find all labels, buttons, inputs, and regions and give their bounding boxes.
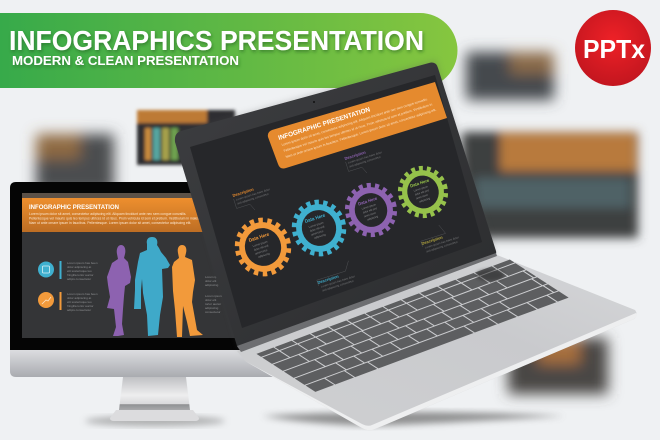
blurred thumbnail: right: [462, 132, 638, 238]
description: blue: [314, 260, 357, 293]
accent bar orange: [60, 292, 62, 310]
description: blue: sed adipiscing consectetur: [322, 279, 354, 292]
description: purple: [344, 145, 386, 178]
camera dot: [313, 101, 315, 103]
monitor right text: dolor elit: [205, 279, 217, 283]
icon: blue circle: [38, 262, 54, 278]
icon: orange circle: [38, 292, 54, 308]
badge: PPTx: PPTx: [583, 34, 646, 64]
gear: green: dolor elit sed: [414, 188, 430, 197]
text block orange: fringilla tortor auctor: [67, 304, 94, 308]
description: green: Lorem ipsum has been dolor: [424, 235, 459, 250]
gear: blue: Lorem ipsum: [308, 220, 325, 229]
monitor chin: [10, 350, 298, 377]
gear: green: Lorem ipsum: [413, 184, 429, 193]
monitor stand: [119, 377, 190, 410]
monitor header: INFOGRAPHIC PRESENTATION: [29, 204, 120, 211]
monitor header: Lorem ipsum dolor sit amet, consectetur adipiscing elit. Aliquam tincidunt ante nec sem congue convallis.: [29, 212, 186, 216]
monitor right text: tortor auctor: [205, 302, 221, 306]
gear: orange: dolor elit sed: [253, 243, 269, 252]
monitor right text: adipiscing: [205, 283, 219, 287]
laptop hinge: [237, 253, 497, 352]
monitor right text: adipiscing: [205, 306, 219, 310]
monitor header: [22, 198, 262, 232]
laptop lid: [175, 63, 496, 350]
text block orange: dolor adipiscing at: [67, 296, 91, 300]
laptop lid shadow: [178, 60, 496, 350]
monitor right text: dolor elit: [205, 298, 217, 302]
laptop header: [268, 82, 447, 168]
text block orange: Lorem ipsum has been: [67, 292, 98, 296]
gear: blue: adipiscing: [314, 232, 327, 240]
text block blue: fringilla tortor auctor: [67, 273, 94, 277]
banner: [0, 13, 458, 88]
monitor base: [110, 410, 199, 421]
laptop header: INFOGRAPHIC PRESENTATION: [277, 106, 371, 142]
blurred thumbnail: top right: [466, 52, 554, 100]
description: blue: Description: [317, 273, 340, 285]
monitor bezel: [10, 182, 298, 350]
gear: blue: amet tortor: [311, 229, 324, 237]
text block orange: adipis consectetur: [67, 308, 91, 312]
accent bar blue: [60, 261, 62, 279]
description: blue: Lorem ipsum has been dolor: [320, 274, 355, 289]
laptop header: Nam ut ante ornare ipsum in faucibus. Pellentesque. Lorem ipsum dolor sit amet, consectetur adipiscing elit.: [285, 108, 437, 159]
blurred thumbnail: upper left: [36, 134, 114, 194]
description: purple: Description: [344, 149, 367, 161]
silhouette: woman: [107, 245, 131, 336]
text block blue: Lorem ipsum has been: [67, 261, 98, 265]
monitor screen: [22, 193, 292, 338]
badge: PPTx: [575, 10, 651, 86]
text block blue: adipis consectetur: [67, 277, 91, 281]
gear: purple: Lorem ipsum: [361, 202, 377, 211]
text block orange: elit scelerisque leo: [67, 300, 92, 304]
gear: purple: [341, 180, 401, 240]
gear: orange: adipiscing: [258, 251, 271, 259]
gear: purple: adipiscing: [367, 214, 379, 222]
laptop: [175, 60, 637, 430]
gear: purple: amet tortor: [363, 211, 377, 218]
gear: orange: [231, 214, 295, 280]
gear: orange: Lorem ipsum: [252, 239, 269, 248]
laptop screen: [190, 75, 482, 328]
title: INFOGRAPHICS PRESENTATION: [9, 25, 424, 56]
gear: orange: Data Here: [248, 231, 270, 243]
description: purple: Lorem ipsum has been dolor: [347, 150, 382, 165]
laptop base: [237, 255, 637, 430]
laptop header: Lorem ipsum dolor sit amet, consectetur adipiscing elit. Aliquam tincidunt ante nec sem congue convallis.: [281, 97, 428, 147]
monitor header: Pellentesque vel mauris quis leo tempus ultrices id ut risus. Proin vehicula id sem et pretium. Vestibulum in malesuada.: [29, 216, 208, 220]
desktop monitor: [10, 182, 298, 426]
keyboard reflection: [476, 269, 504, 281]
description: orange: Description: [232, 186, 255, 198]
keyboard: [259, 261, 564, 389]
gear: purple: dolor elit sed: [362, 206, 378, 215]
silhouette: man standing: [172, 245, 203, 337]
gear: blue: dolor elit sed: [309, 224, 325, 233]
description: green: [418, 220, 461, 254]
gear: green: adipiscing: [419, 196, 431, 204]
text block blue: [67, 261, 98, 281]
text block blue: dolor adipiscing at: [67, 265, 91, 269]
description: green: sed adipiscing consectetur: [426, 240, 458, 253]
monitor header: Nam ut ante ornare ipsum in faucibus. Pellentesque. Lorem ipsum dolor sit amet, consectetur adipiscing elit.: [29, 221, 191, 225]
subtitle: MODERN & CLEAN PRESENTATION: [12, 53, 239, 68]
text block orange: [67, 292, 98, 312]
description: orange: Lorem ipsum has been dolor: [235, 187, 270, 202]
gear: blue: [288, 196, 350, 260]
description: purple: sed adipiscing consectetur: [349, 155, 381, 168]
monitor right text: Lorem ipsum: [205, 294, 223, 298]
silhouette: man with phone: [134, 237, 170, 336]
laptop header: Pellentesque vel mauris quis leo tempus ultrices id ut risus. Proin vehicula id sem et pretium. Vestibulum in.: [283, 102, 434, 153]
description: orange: sed adipiscing consectetur: [237, 192, 269, 205]
blurred thumbnail: bottom right: [508, 338, 608, 394]
blurred thumbnail: centre left: [137, 110, 235, 165]
monitor right text: consectetur: [205, 310, 221, 314]
gear: green: [395, 163, 451, 221]
gear: purple: Data Here: [357, 195, 378, 207]
text block blue: elit scelerisque leo: [67, 269, 92, 273]
description: orange: [232, 182, 274, 215]
gear: green: amet tortor: [415, 193, 429, 200]
laptop shadow: [262, 412, 565, 426]
monitor right text: Lorem ipsum: [205, 275, 223, 279]
monitor right text: [205, 275, 223, 314]
monitor shadow: [85, 416, 225, 426]
gear: green: Data Here: [409, 177, 430, 189]
gear: blue: Data Here: [304, 212, 326, 224]
description: green: Description: [421, 234, 444, 246]
gear: orange: amet tortor: [255, 248, 268, 256]
